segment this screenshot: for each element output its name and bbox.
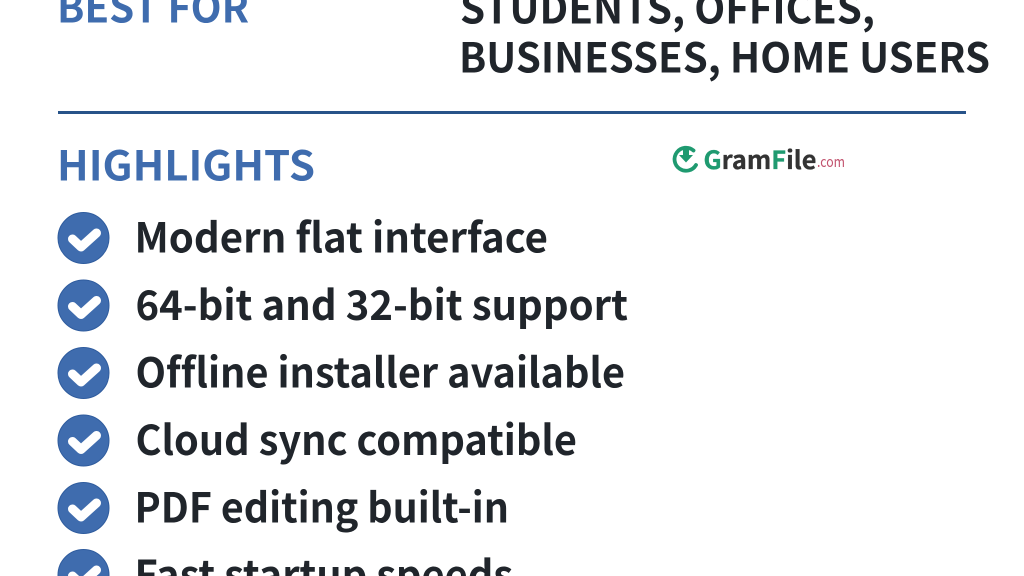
icon: check bbox=[58, 415, 109, 466]
logo: GramFile.com: .com bbox=[817, 151, 845, 172]
list item: offline installer: Offline installer available bbox=[136, 340, 625, 400]
logo: GramFile.com bbox=[675, 141, 845, 177]
icon: check bbox=[58, 212, 109, 264]
icon: check bbox=[58, 482, 109, 534]
icon: check bbox=[58, 280, 109, 331]
list item: pdf editing: PDF editing built-in bbox=[134, 474, 509, 534]
list item: cloud sync: Cloud sync compatible bbox=[136, 407, 577, 467]
list item: modern flat interface: Modern flat interface bbox=[134, 204, 548, 264]
text block: audience bbox=[459, 0, 990, 84]
heading: highlights: HIGHLIGHTS bbox=[57, 132, 315, 192]
list item: bit support: 64-bit and 32-bit support bbox=[136, 272, 628, 332]
text block: audience: BUSINESSES, HOME USERS bbox=[459, 24, 990, 84]
icon: check bbox=[58, 348, 109, 398]
icon: green download circle bbox=[675, 148, 696, 171]
logo: GramFile.com: GramFile bbox=[704, 141, 816, 177]
icon: check bbox=[58, 550, 109, 576]
